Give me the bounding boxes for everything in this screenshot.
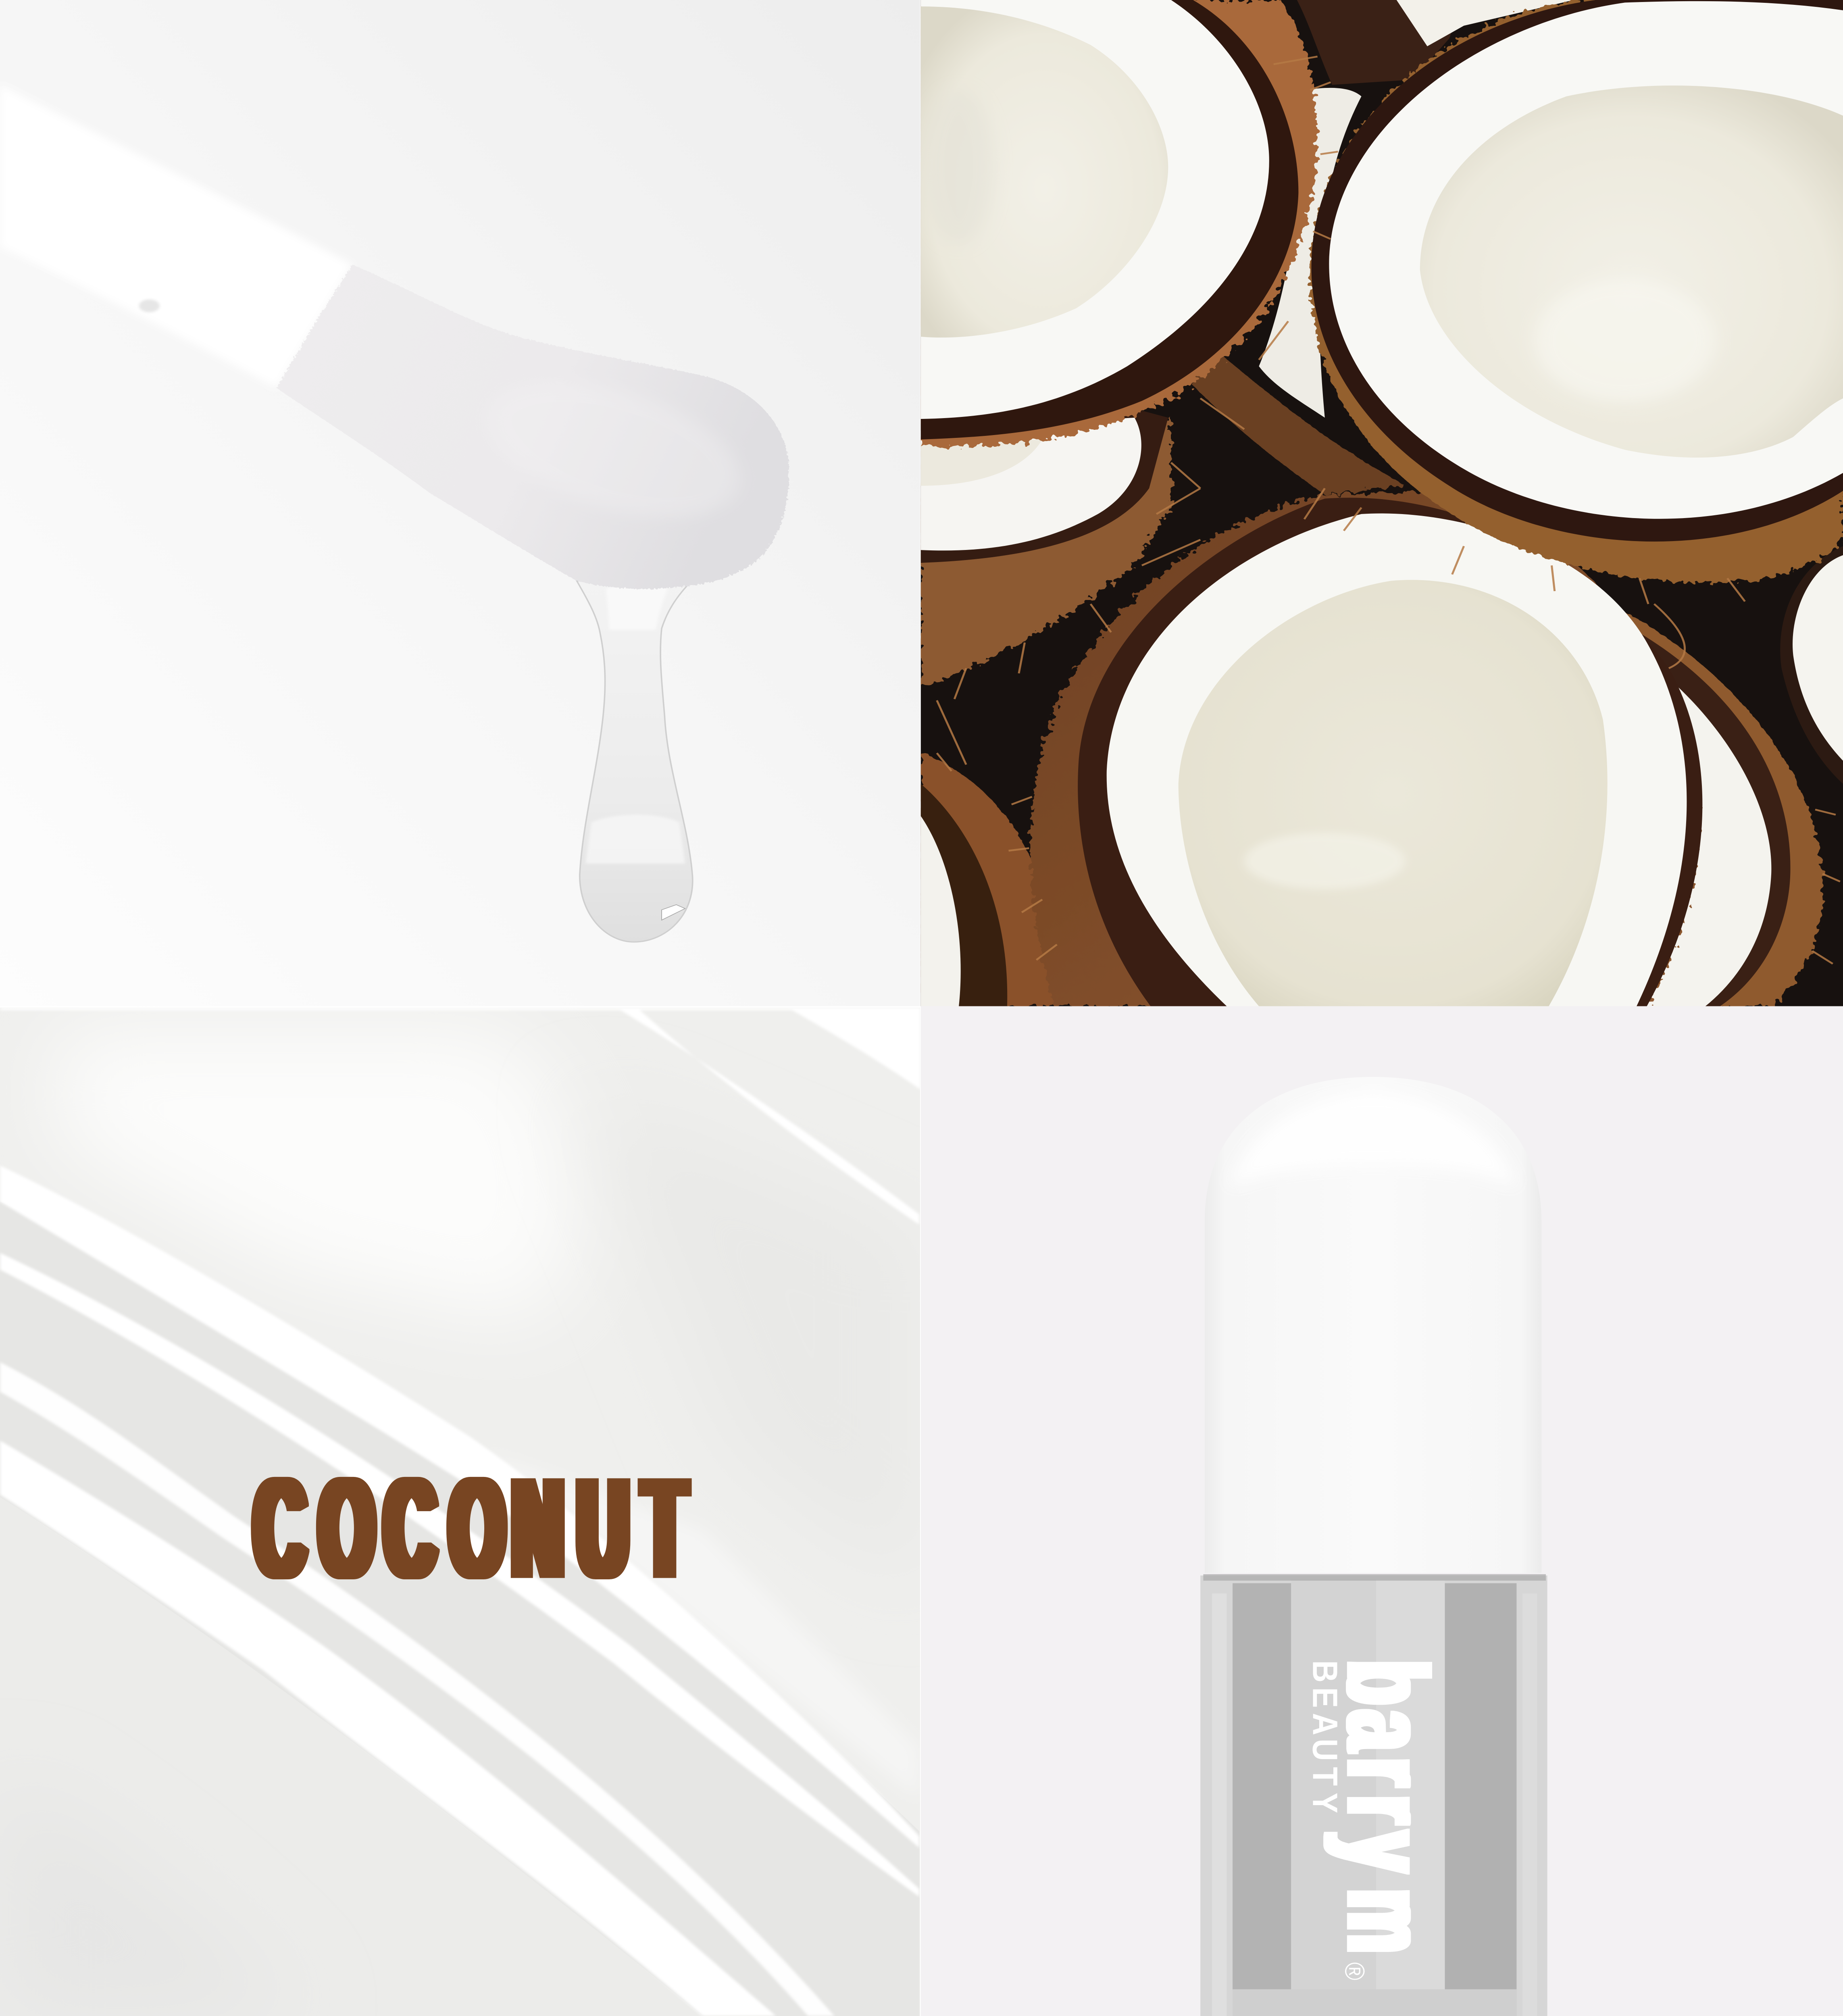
title: COCONUT: COCONUT bbox=[255, 1449, 686, 1607]
coconut: bottom left bbox=[921, 752, 1061, 1006]
swatch light upper area bbox=[58, 1028, 580, 1324]
wand dot bbox=[139, 300, 160, 312]
coconut: back husk centre bbox=[1193, 350, 1405, 495]
logo: BEAUTY: BEAUTY bbox=[1306, 1660, 1344, 1813]
cap shadow line bbox=[1203, 1574, 1546, 1581]
tube body bbox=[1200, 1575, 1547, 2016]
foam glint bbox=[469, 356, 761, 544]
logo: registered mark: ® bbox=[1339, 1962, 1370, 1980]
coconut husk fibres bbox=[937, 56, 1840, 964]
logo: barry m.: barry m bbox=[1324, 1660, 1451, 1953]
swatch lower area bbox=[0, 1497, 703, 2016]
swatch white highlights bbox=[0, 1008, 921, 2016]
coconut: far right edge bbox=[1780, 546, 1843, 784]
coconut: top right, largest bbox=[1310, 0, 1843, 583]
coconut: behind top middle bbox=[1259, 0, 1574, 418]
panel: applicator with dripping gloss bbox=[0, 0, 921, 1006]
foam applicator tip bbox=[277, 265, 789, 589]
swatch grey right area bbox=[585, 1092, 919, 1593]
applicator wand bbox=[6, 97, 345, 378]
panel: gloss swatch texture bbox=[0, 1008, 921, 2016]
tube cap bbox=[1205, 1077, 1541, 1573]
coconut: bottom centre bbox=[1030, 491, 1702, 1006]
cap top sheen bbox=[1230, 1092, 1516, 1189]
swatch darker band bbox=[0, 1202, 919, 2016]
coconut: middle left bbox=[921, 409, 1171, 687]
gloss drop bbox=[577, 581, 693, 942]
band lower right lighter bbox=[483, 1452, 919, 1799]
panel: product tube bbox=[921, 1006, 1843, 2016]
panel: coconut halves photo bbox=[921, 0, 1843, 1006]
coconut: top left bbox=[921, 0, 1317, 447]
coconut: back right crescent bbox=[1610, 604, 1823, 1006]
